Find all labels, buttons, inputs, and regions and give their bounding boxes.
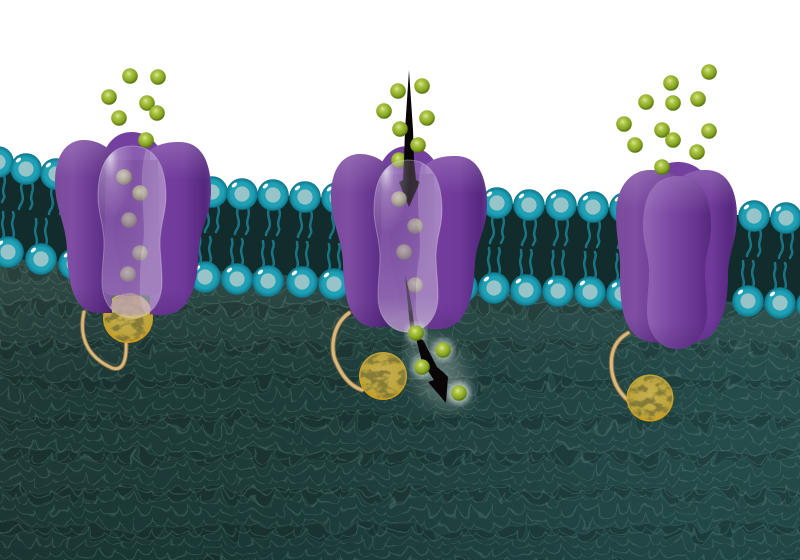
tether: channel 3: [611, 333, 630, 402]
membrane core: dark hydrophobic layer: [0, 164, 800, 306]
front transparent subunit: channel 2: [374, 160, 442, 332]
left subunit: channel 1: [55, 140, 112, 313]
back subunit: channel 1: [105, 132, 160, 240]
right subunit: channel 2: [426, 156, 487, 329]
glow around released ions: [406, 323, 472, 410]
arrow: inward flow middle segment: [405, 275, 415, 336]
ions in pore: channel 1: [116, 169, 148, 282]
right subunit: channel 1: [150, 142, 211, 315]
right subunit: channel 3: [680, 170, 737, 343]
back subunit: channel 3: [650, 162, 706, 260]
lipid tails: upper leaflet: [0, 176, 793, 258]
lipid tails: lower leaflet: [2, 212, 800, 291]
channel 3: closed: [611, 64, 737, 421]
ion at pore mouth: channel 2: [391, 152, 407, 168]
channel 2: open, ions flowing through: [331, 70, 487, 410]
front transparent subunit: channel 1: [98, 146, 166, 318]
pore core: channel 1: [103, 160, 161, 296]
lipid heads: upper leaflet: [0, 146, 800, 234]
ions released: channel 2: [408, 325, 467, 401]
tether: channel 2: [333, 313, 362, 390]
ball: channel 2: [359, 352, 407, 400]
ions entering: channel 2: [376, 78, 435, 153]
arrow: outflow head over glow: [416, 338, 448, 403]
lipid bilayer: [0, 146, 800, 321]
pore core: channel 2: [379, 174, 437, 332]
ions entering: channel 1: [101, 68, 166, 148]
cytoplasm with scalloped texture: [0, 252, 800, 560]
ball seen through the lobe: channel 1: [110, 293, 151, 315]
left subunit: channel 3: [616, 170, 680, 343]
left subunit: channel 2: [331, 154, 388, 327]
ions in pore: channel 2: [391, 191, 423, 293]
arrow: inward flow upper segment: [399, 70, 420, 207]
lipid heads: lower leaflet: [0, 236, 800, 321]
tether: channel 1: [82, 312, 126, 369]
ball: channel 3: [626, 374, 674, 422]
ball: channel 1: [103, 293, 153, 343]
channel 1: open, ball plugging the pore: [55, 68, 211, 369]
front subunit: channel 3: [643, 176, 711, 349]
back subunit: channel 2: [381, 146, 436, 254]
ions blocked: channel 3: [616, 64, 717, 175]
